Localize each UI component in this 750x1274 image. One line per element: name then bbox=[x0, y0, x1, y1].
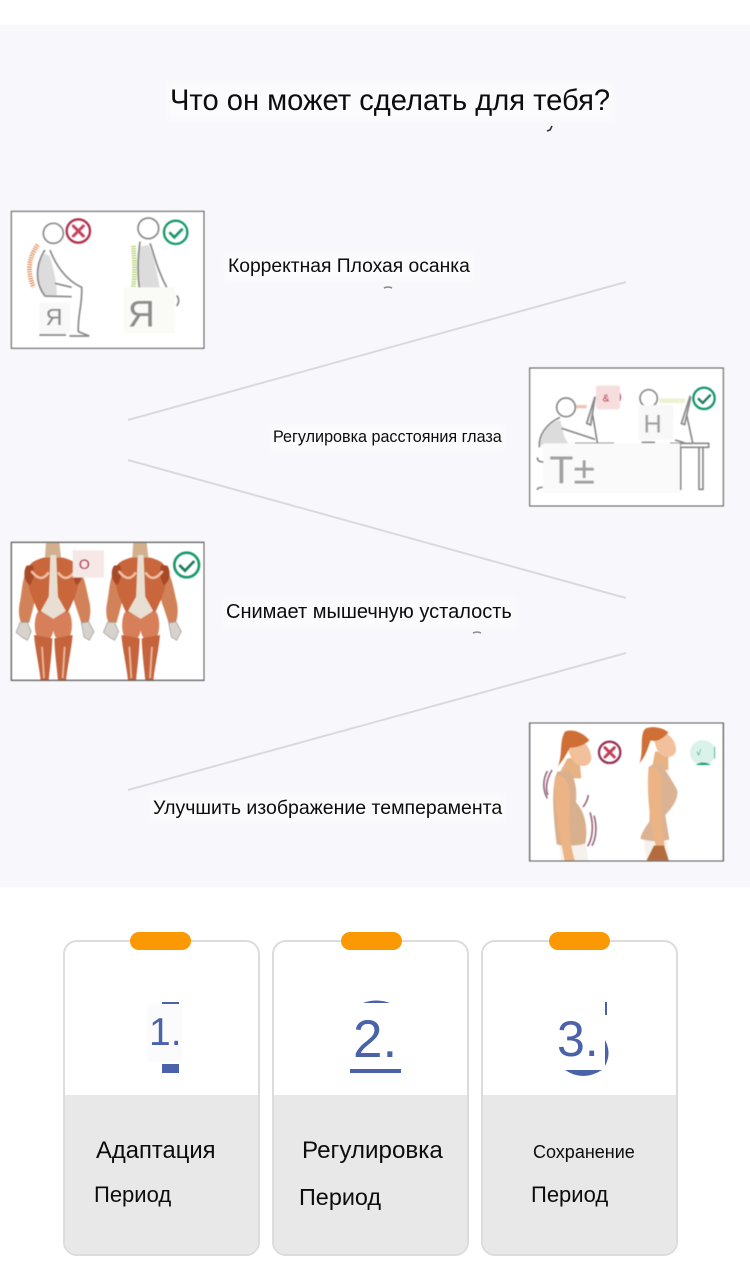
figure: good sitting posture bbox=[133, 218, 179, 306]
text patch: letter H bbox=[638, 405, 673, 440]
label: eye distance: Регулировка расстояния глаза bbox=[273, 428, 502, 446]
label: posture: Корректная Плохая осанка bbox=[228, 256, 470, 277]
text patch: large letter: Я bbox=[128, 293, 155, 335]
text patch: T plus-minus: Т± bbox=[549, 448, 595, 492]
text: period 1: Период bbox=[94, 1182, 171, 1207]
panel: eye distance image bbox=[528, 366, 725, 508]
card: maintenance bbox=[481, 940, 678, 1256]
icon: pink patch with letter bbox=[73, 550, 104, 578]
card lower band bbox=[483, 1095, 676, 1254]
title: Что он может сделать для тебя? bbox=[170, 85, 610, 117]
icon: teal check patch: √ bbox=[696, 749, 701, 758]
card lower band bbox=[64, 1095, 258, 1254]
number 1 with fragments: 1. bbox=[149, 1011, 182, 1054]
icon: red cross bbox=[599, 742, 620, 763]
figure: bad sitting posture bbox=[30, 223, 89, 336]
text: period 2: Период bbox=[299, 1184, 381, 1210]
connector lines bbox=[128, 126, 626, 791]
text patch: T plus-minus bbox=[543, 443, 680, 493]
icon: pink patch with letter: О bbox=[79, 556, 90, 572]
text patch: small letter: Я bbox=[46, 304, 62, 330]
icon: green check bbox=[693, 388, 715, 409]
text: maintenance: Сохранение bbox=[533, 1142, 635, 1162]
panel: posture image bbox=[10, 210, 206, 350]
number 3 with fragments bbox=[557, 1002, 608, 1076]
card: adjustment bbox=[272, 940, 469, 1256]
card lower band bbox=[274, 1095, 467, 1254]
text: adjustment: Регулировка bbox=[302, 1137, 443, 1164]
number 2 with fragments: 2. bbox=[353, 1010, 397, 1069]
panel: women posture image bbox=[528, 722, 725, 862]
panel: muscles image bbox=[10, 541, 206, 682]
icon: pink patch with symbol bbox=[596, 385, 621, 409]
icon: teal check patch bbox=[690, 740, 715, 765]
text: period 3: Период bbox=[531, 1182, 608, 1207]
pill: card 2 tab bbox=[340, 932, 402, 950]
figure: upright woman bbox=[639, 727, 677, 860]
text patch: large letter bbox=[123, 287, 175, 335]
figure: hunched at desk bbox=[537, 397, 614, 490]
label: temperament: Улучшить изображение темперамента bbox=[153, 797, 502, 819]
arrows: slouch curves bbox=[544, 770, 596, 846]
icon: green check bbox=[174, 553, 199, 577]
text patch: letter H: Н bbox=[644, 410, 662, 438]
light background panel bbox=[0, 25, 750, 887]
number 3 with fragments: 3. bbox=[557, 1011, 599, 1067]
icon: green check bbox=[164, 221, 187, 244]
figure: slouching woman bbox=[553, 730, 591, 860]
label: muscle fatigue: Снимает мышечную усталость bbox=[226, 601, 512, 623]
text: adaptation: Адаптация bbox=[96, 1137, 216, 1164]
pill: card 3 tab bbox=[549, 932, 610, 950]
icon: red cross bbox=[67, 219, 90, 243]
number 1 with fragments bbox=[149, 1002, 182, 1073]
figure: muscles right bbox=[103, 542, 181, 680]
figure: muscles left bbox=[16, 542, 94, 680]
pill: card 1 tab bbox=[130, 932, 191, 950]
text patch: small letter bbox=[39, 303, 70, 333]
icon: pink patch with symbol: & bbox=[603, 393, 610, 404]
card: adaptation bbox=[62, 940, 260, 1256]
figure: correct desk posture bbox=[640, 390, 709, 490]
